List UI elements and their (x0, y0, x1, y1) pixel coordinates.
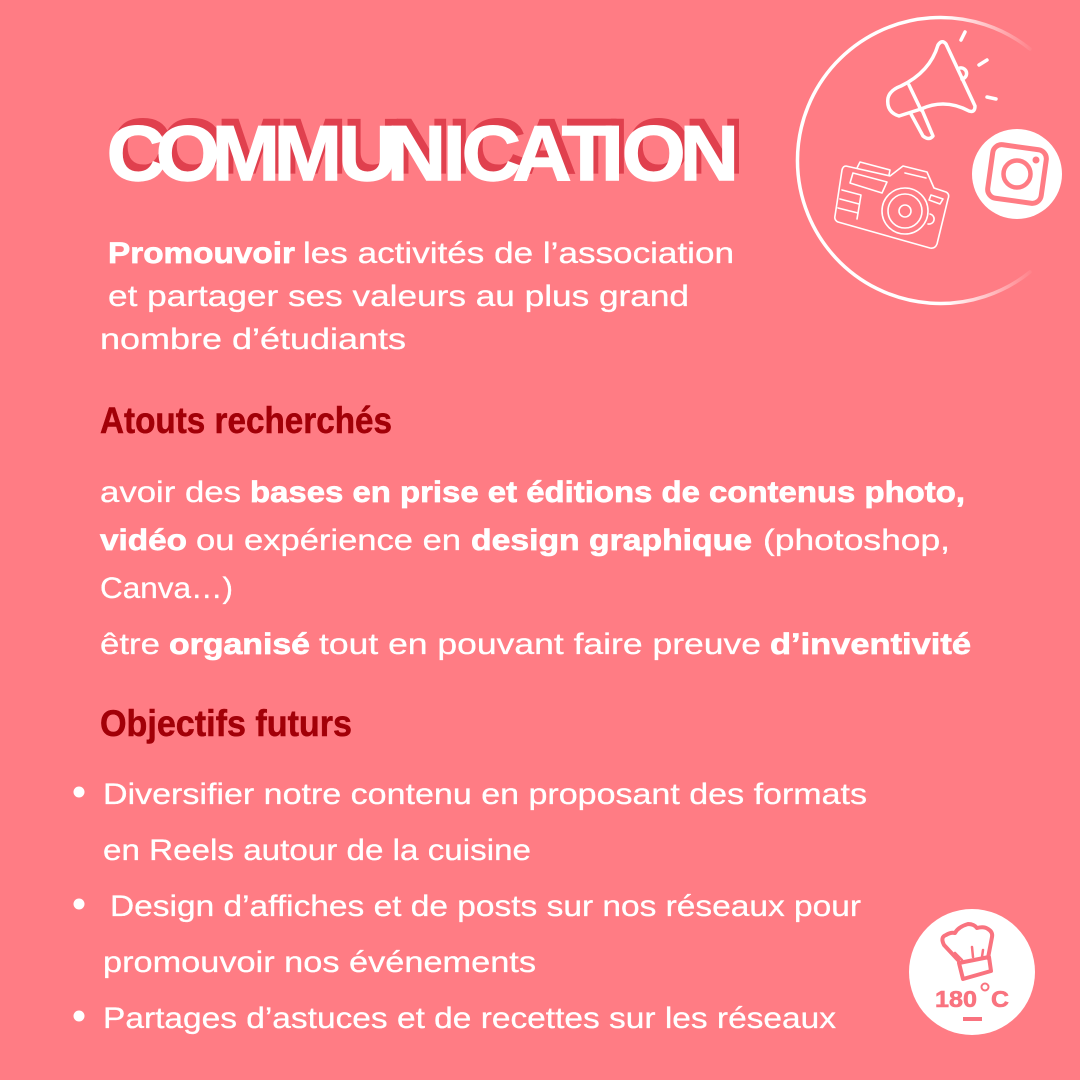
heading: Objectifs futurs: Objectifs futurs (100, 703, 352, 744)
title: COMMUNICATION: COMMUNICATION (107, 110, 739, 197)
bullet list: objectifs (74, 778, 867, 1035)
text: 180°C: 180 (935, 986, 977, 1012)
text block: introduction: les activités de l’association (303, 237, 734, 270)
text block: introduction: Promouvoir (108, 237, 295, 270)
text block: atouts: être (100, 628, 160, 661)
circle outline (797, 18, 1030, 304)
text block: introduction (100, 237, 734, 356)
text block: atouts: vidéo (100, 524, 187, 557)
bullet list: objectifs: promouvoir nos événements (103, 946, 536, 979)
icon: instagram badge (972, 129, 1062, 219)
text block: atouts: organisé (169, 628, 310, 661)
text block: atouts: (photoshop, (763, 524, 950, 557)
icon: camera (835, 162, 949, 248)
bullet list: objectifs: en Reels autour de la cuisine (103, 834, 531, 867)
text block: introduction: et partager ses valeurs au plus grand (108, 280, 689, 313)
heading: Atouts recherchés: Atouts recherchés (100, 400, 392, 441)
bullet list: objectifs: Partages d’astuces et de recettes sur les réseaux (103, 1002, 836, 1035)
icon: chef hat (942, 924, 992, 979)
logo: 180°C chef hat badge: C (991, 986, 1009, 1012)
bullet list: objectifs: Diversifier notre contenu en proposant des formats (103, 778, 867, 811)
text block: atouts: tout en pouvant faire preuve (319, 628, 761, 661)
text block: atouts: ou expérience en (196, 524, 461, 557)
decorative icon cluster (797, 18, 1062, 304)
text block: atouts: design graphique (471, 524, 752, 557)
text block: atouts (100, 476, 971, 661)
icon: megaphone (888, 32, 996, 138)
text block: introduction: nombre d’étudiants (100, 323, 406, 356)
text block: atouts: avoir des (100, 476, 241, 509)
bullet list: objectifs: Design d’affiches et de posts sur nos réseaux pour (110, 890, 861, 923)
text block: atouts: Canva…) (100, 572, 233, 605)
title: COMMUNICATION: COMMUNICATION (112, 103, 744, 190)
text block: atouts: d’inventivité (770, 628, 971, 661)
text block: atouts: bases en prise et éditions de contenus photo, (250, 476, 965, 509)
logo: 180°C chef hat badge (909, 909, 1035, 1035)
